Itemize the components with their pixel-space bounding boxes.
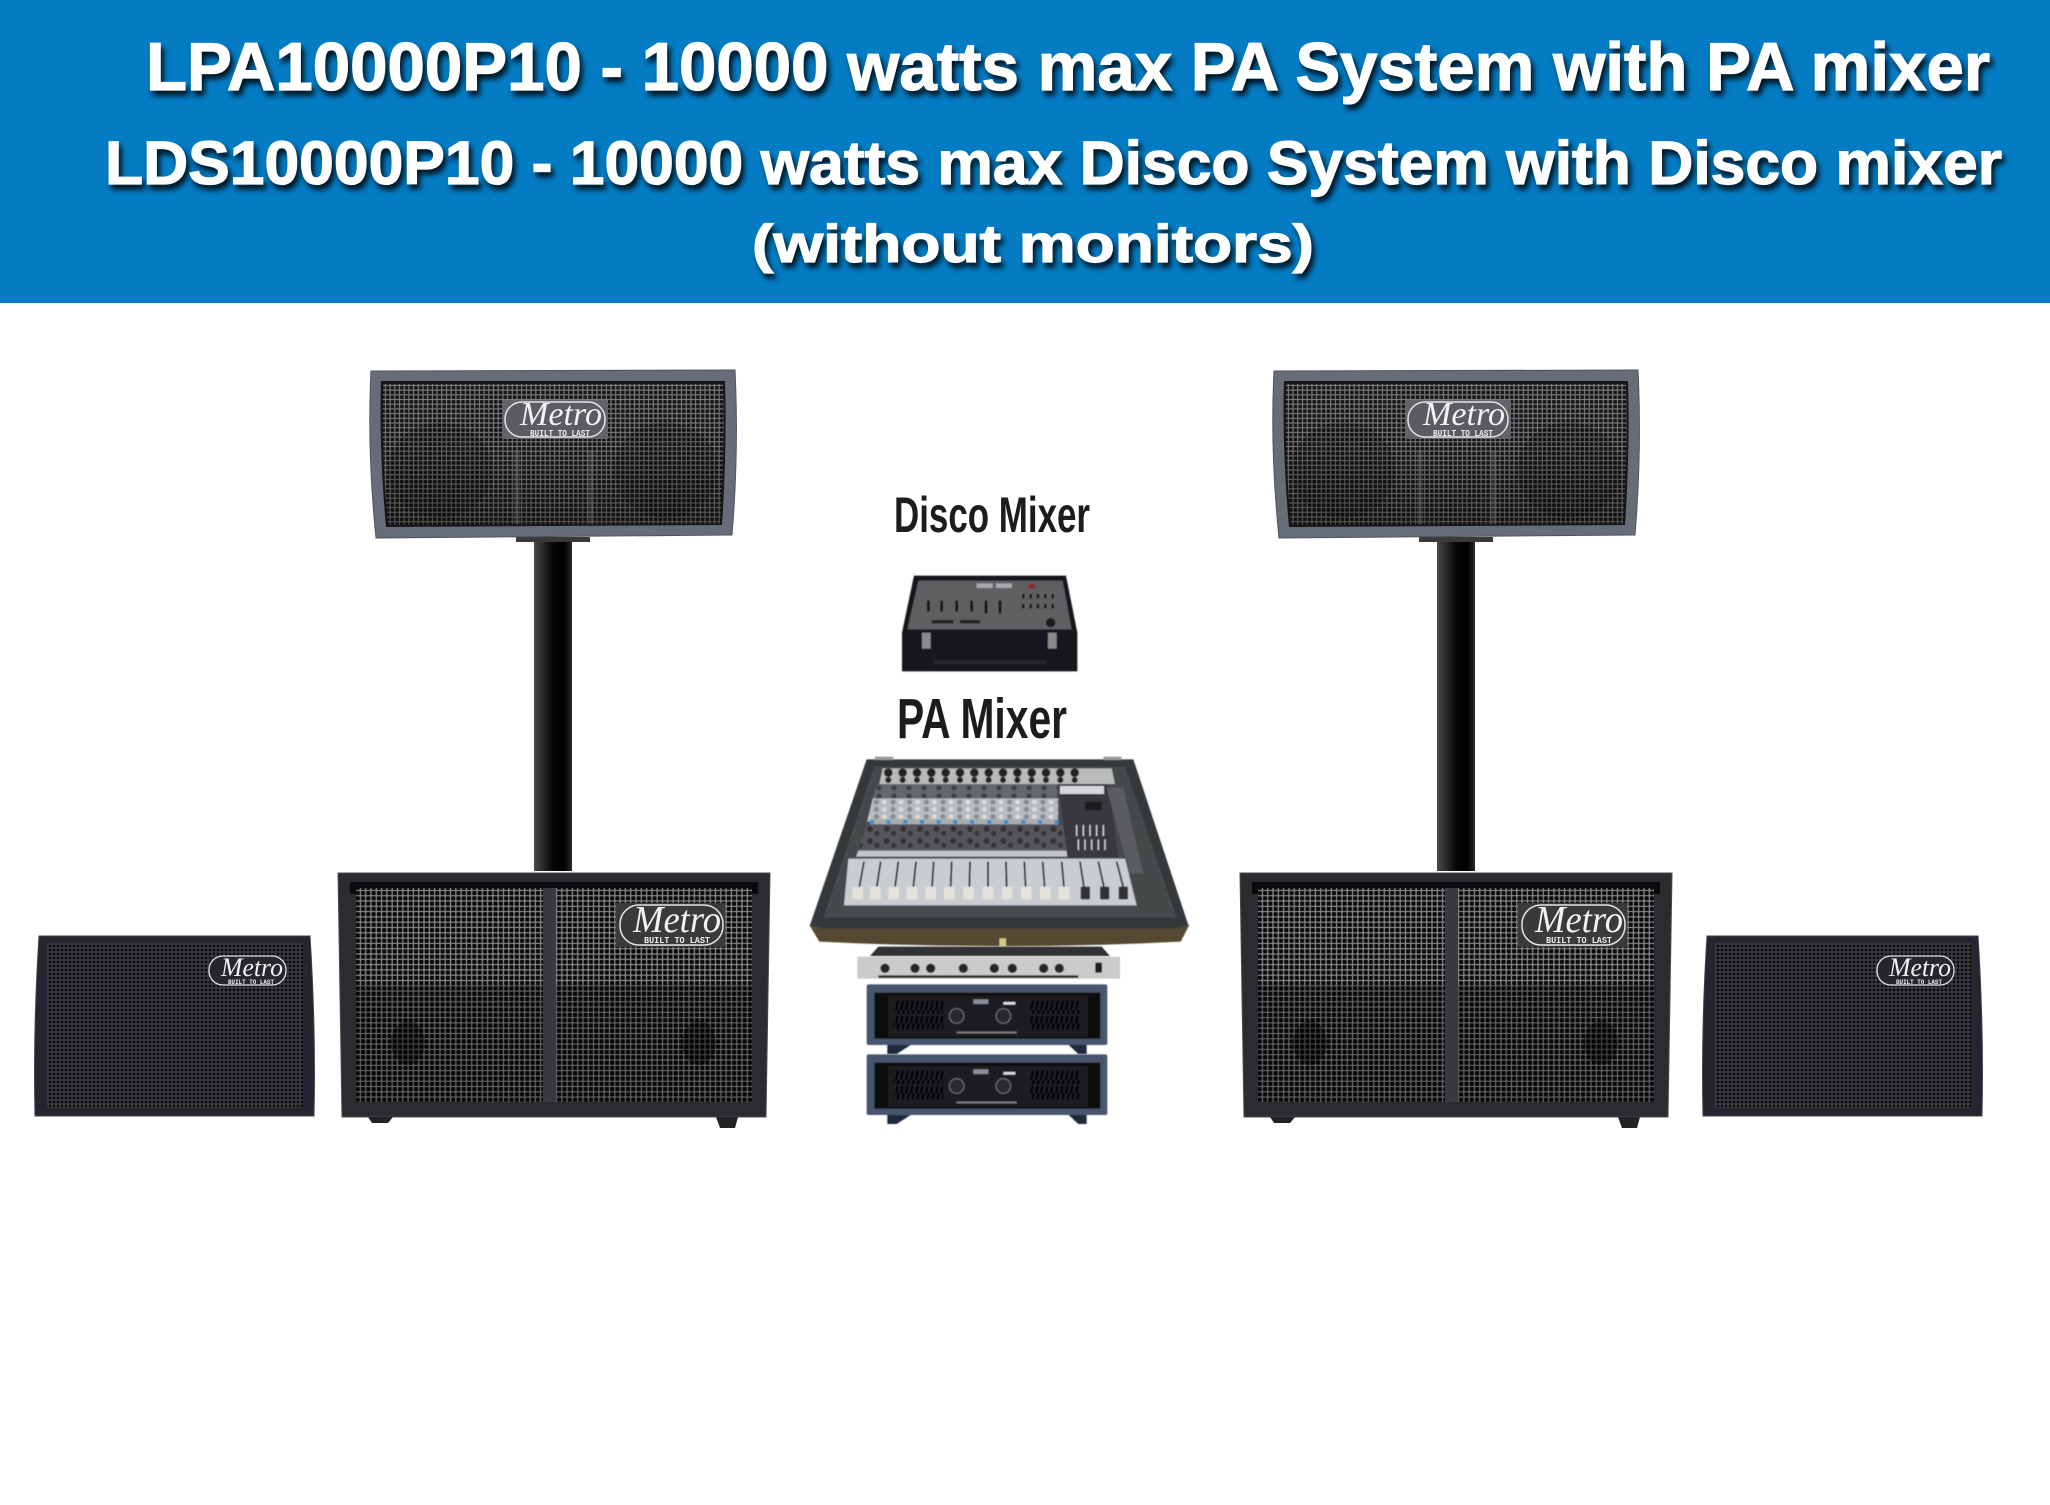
title line: Disco system: LDS10000P10 - 10000 watts max Disco System with Disco mixer bbox=[105, 129, 2002, 197]
left small speaker bbox=[34, 936, 314, 1116]
logo: Metro bbox=[220, 953, 283, 982]
left big subwoofer bbox=[338, 873, 770, 1128]
power amplifier 2 bbox=[867, 1054, 1107, 1124]
logo plate: BUILT TO LAST bbox=[1433, 429, 1494, 439]
logo plate: Metro bbox=[632, 899, 721, 941]
right top speaker on pole bbox=[1273, 370, 1639, 871]
logo: Metro bbox=[1888, 953, 1951, 982]
cabinet bbox=[1273, 370, 1639, 538]
disco mixer label: Disco Mixer bbox=[894, 487, 1090, 543]
fader caps bbox=[852, 887, 1069, 899]
input jack row bbox=[879, 768, 1115, 784]
logo plate bbox=[502, 396, 608, 439]
pole bbox=[534, 540, 572, 871]
logo: BUILT TO LAST bbox=[228, 979, 274, 986]
cabinet bbox=[370, 370, 736, 538]
channel strips bbox=[873, 784, 1057, 798]
subtitle: without monitors: (without monitors) bbox=[752, 215, 1314, 274]
right big subwoofer bbox=[1240, 873, 1672, 1128]
case bbox=[809, 925, 1189, 946]
logo plate: Metro bbox=[1422, 396, 1505, 433]
pole bbox=[1437, 540, 1475, 871]
right small speaker bbox=[1702, 936, 1982, 1116]
logo plate: BUILT TO LAST bbox=[530, 429, 591, 439]
disco mixer bbox=[902, 576, 1077, 671]
logo: BUILT TO LAST bbox=[1896, 979, 1942, 986]
power amplifier 1 bbox=[867, 984, 1107, 1054]
logo plate: Metro bbox=[519, 396, 602, 433]
header banner bbox=[0, 0, 2050, 303]
case latch bbox=[999, 938, 1006, 946]
title line: PA system: LPA10000P10 - 10000 watts max PA System with PA mixer bbox=[146, 29, 1990, 105]
logo plate: Metro bbox=[1534, 899, 1623, 941]
master section bbox=[1058, 784, 1118, 857]
logo plate: BUILT TO LAST bbox=[644, 936, 711, 946]
blue indicator row bbox=[870, 820, 1059, 824]
feet bbox=[368, 1117, 393, 1123]
feet bbox=[1270, 1117, 1295, 1123]
logo plate bbox=[1405, 396, 1511, 439]
left top speaker on pole bbox=[370, 370, 736, 871]
PA mixer bbox=[809, 757, 1189, 946]
PA mixer label: PA Mixer bbox=[897, 687, 1067, 751]
rack processor bbox=[857, 947, 1120, 979]
logo plate: BUILT TO LAST bbox=[1546, 936, 1613, 946]
fader panel bbox=[844, 859, 1137, 905]
